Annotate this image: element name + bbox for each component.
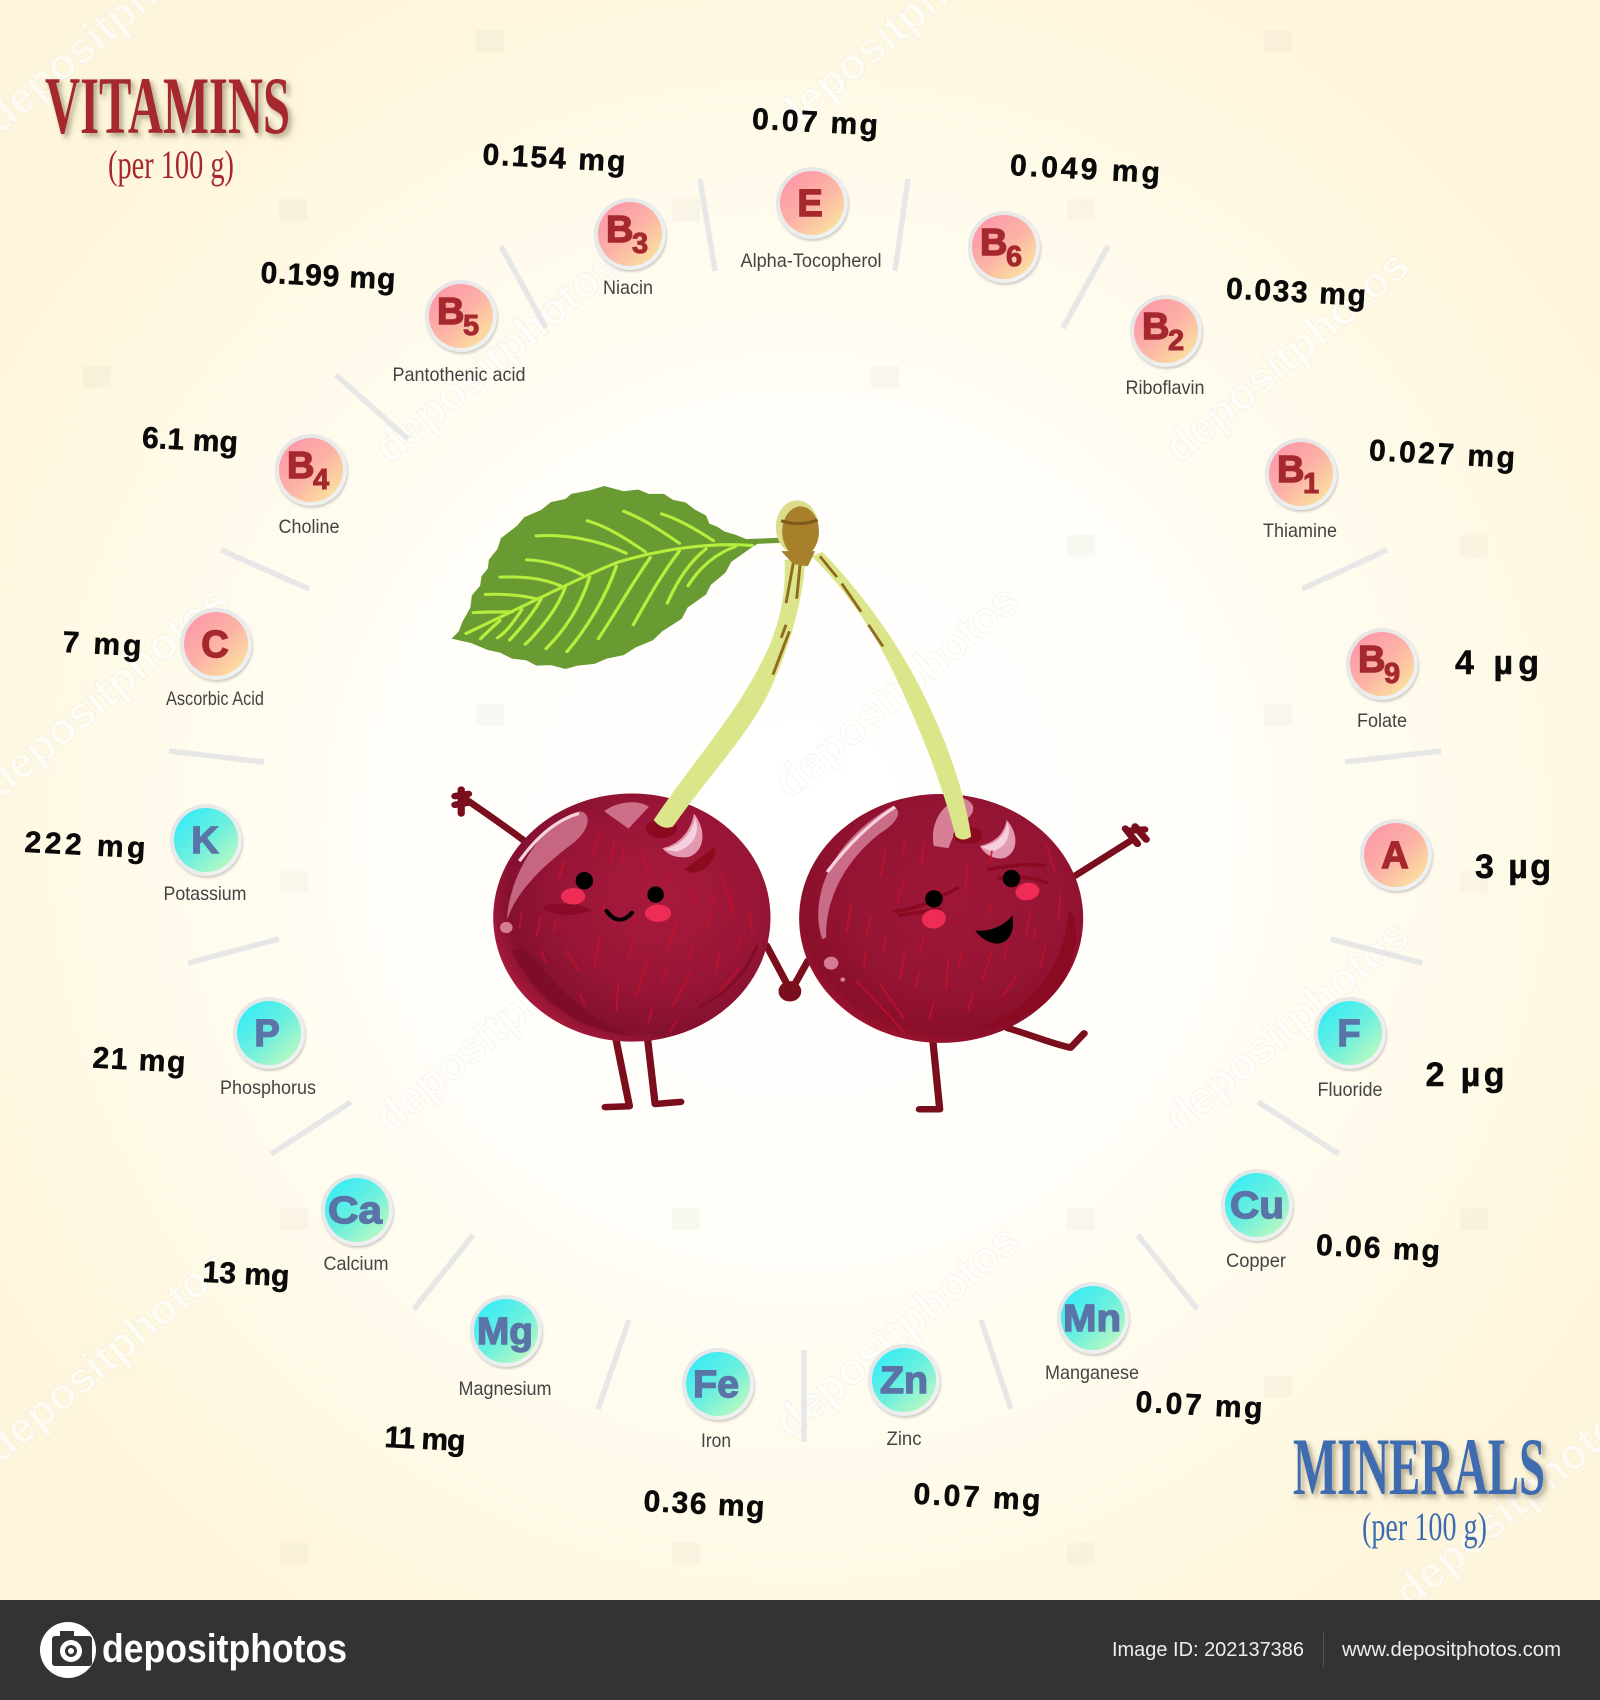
name: Potassium	[164, 883, 246, 905]
name: Phosphorus	[220, 1077, 316, 1099]
amount: 0.033 mg	[1225, 272, 1367, 313]
badge Ca	[321, 1174, 393, 1246]
amount: 13 mg	[202, 1256, 290, 1293]
amount: 21 mg	[92, 1042, 186, 1079]
badge B6: 6	[1006, 241, 1022, 273]
nutrient: vitamin B5	[260, 256, 526, 386]
logo camera icon	[40, 1622, 96, 1678]
amount: 0.154 mg	[482, 138, 626, 179]
nutrient: vitamin B1	[1263, 434, 1516, 542]
watermarks: depositphotos	[1155, 240, 1419, 473]
badge C: C	[201, 624, 229, 666]
tick dividers	[169, 179, 1441, 1442]
name: Zinc	[886, 1428, 922, 1450]
name: Magnesium	[458, 1378, 552, 1400]
nutrient: vitamin B2	[1126, 272, 1367, 399]
right cherry face	[919, 870, 1042, 944]
watermarks: depositphotos	[365, 910, 629, 1143]
badge B1: B	[1277, 449, 1304, 491]
badge A	[1360, 819, 1432, 891]
name: Riboflavin	[1126, 377, 1204, 399]
name: Choline	[278, 516, 340, 538]
left cherry limbs	[455, 790, 791, 1107]
title: minerals	[1293, 1421, 1545, 1549]
right cherry body	[799, 794, 1083, 1043]
nutrient: magnesium	[384, 1295, 552, 1458]
left cherry face	[561, 872, 671, 922]
badge Cu	[1221, 1169, 1293, 1241]
nutrient: zinc	[868, 1344, 1041, 1517]
badge Mn	[1057, 1282, 1129, 1354]
name: Calcium	[324, 1253, 388, 1275]
image id: Image ID: 202137386	[1112, 1639, 1304, 1661]
badge B4: B	[287, 445, 314, 487]
badge B2: B	[1142, 306, 1169, 348]
badge B3: B	[606, 209, 633, 251]
nutrient: vitamin B9	[1346, 628, 1539, 732]
amount: 11 mg	[384, 1421, 466, 1458]
badge B2	[1130, 295, 1202, 367]
badge P	[233, 997, 305, 1069]
left cherry body	[493, 794, 771, 1042]
name: Thiamine	[1263, 520, 1337, 542]
amount: 2 µg	[1426, 1056, 1504, 1094]
amount: 0.027 mg	[1368, 434, 1516, 475]
badge Fe	[682, 1348, 754, 1420]
footer bar	[0, 1600, 1600, 1700]
badge P: P	[254, 1013, 280, 1055]
amount: 6.1 mg	[141, 422, 239, 459]
subtitle: vitamins per 100 g: (per 100 g)	[108, 142, 234, 187]
badge K	[170, 804, 242, 876]
amount: 7 mg	[62, 626, 142, 663]
stem knot	[776, 500, 819, 566]
badge B4	[275, 434, 347, 506]
leaf veins	[466, 511, 752, 652]
badge B5: B	[437, 291, 464, 333]
nutrient: iron	[643, 1348, 765, 1524]
badge E	[776, 167, 848, 239]
badge K: K	[191, 820, 219, 862]
badge Cu: Cu	[1230, 1185, 1284, 1227]
watermarks: depositphotos	[765, 575, 1029, 808]
name: Ascorbic Acid	[166, 688, 264, 710]
amount: 0.199 mg	[260, 256, 396, 297]
title: vitamins: VITAMINS	[45, 60, 290, 151]
website: www.depositphotos.com	[1341, 1639, 1561, 1661]
badge B9: B	[1358, 639, 1385, 681]
badge F: F	[1337, 1013, 1361, 1055]
name: Fluoride	[1318, 1079, 1382, 1101]
nutrient: vitamin A	[1360, 819, 1551, 891]
amount: 0.06 mg	[1315, 1229, 1441, 1268]
name: Copper	[1226, 1250, 1286, 1272]
nutrient: manganese	[1045, 1282, 1263, 1425]
badge B1	[1265, 438, 1337, 510]
nutrient: phosphorus	[92, 997, 316, 1099]
badge B1: 1	[1303, 468, 1319, 500]
nutrient: vitamin C	[62, 608, 264, 710]
amount: 3 µg	[1475, 848, 1551, 886]
subtitle: minerals per 100 g: (per 100 g)	[1362, 1504, 1487, 1549]
title: vitamins	[45, 60, 290, 187]
amount: 222 mg	[24, 826, 146, 865]
badge B3	[594, 198, 666, 270]
amount: 4 µg	[1455, 644, 1539, 682]
badge Mg: Mg	[477, 1311, 533, 1353]
badge Zn	[868, 1344, 940, 1416]
footer divider	[1323, 1633, 1324, 1667]
badge B2: 2	[1168, 325, 1184, 357]
name: Iron	[701, 1430, 731, 1452]
badge B5: 5	[463, 310, 479, 342]
nutrient: copper	[1221, 1169, 1441, 1272]
badge B3: 3	[632, 228, 648, 260]
nutrient: potassium	[24, 804, 246, 905]
badge B5	[425, 280, 497, 352]
amount: 0.07 mg	[913, 1478, 1041, 1517]
watermarks: depositphotos	[1155, 910, 1419, 1143]
right cherry limbs	[782, 826, 1146, 1109]
badge B6	[968, 211, 1040, 283]
badge B9	[1346, 628, 1418, 700]
badge Mg	[470, 1295, 542, 1367]
amount: 0.36 mg	[643, 1485, 765, 1524]
name: Alpha-Tocopherol	[740, 250, 882, 272]
badge Ca: Ca	[328, 1190, 383, 1232]
badge B6: B	[980, 222, 1007, 264]
logo wordmark: depositphotos	[102, 1627, 347, 1671]
badge E: E	[797, 183, 823, 225]
badge Fe: Fe	[693, 1364, 739, 1406]
watermarks: depositphotos	[365, 240, 629, 473]
name: Niacin	[603, 277, 653, 299]
badge B4: 4	[313, 464, 329, 496]
name: Folate	[1357, 710, 1407, 732]
nutrient: fluoride	[1314, 997, 1504, 1101]
stems	[654, 552, 971, 839]
nutrient: vitamin B6	[968, 149, 1161, 283]
badge Mn: Mn	[1063, 1298, 1121, 1340]
nutrient: vitamin B3	[482, 138, 666, 299]
amount: 0.07 mg	[1135, 1386, 1263, 1425]
amount: 0.049 mg	[1009, 149, 1161, 190]
badge Zn: Zn	[880, 1360, 928, 1402]
name: Manganese	[1045, 1362, 1139, 1384]
nutrient: calcium	[202, 1174, 393, 1293]
badge A: A	[1381, 835, 1409, 877]
leaf	[452, 486, 781, 669]
watermarks: depositphotos	[765, 1215, 1029, 1448]
badge B9: 9	[1384, 658, 1400, 690]
nutrient: vitamin B4	[141, 422, 347, 538]
illustration: cherry characters	[452, 486, 1146, 1109]
badge F	[1314, 997, 1386, 1069]
name: Pantothenic acid	[392, 364, 526, 386]
amount: 0.07 mg	[751, 103, 879, 142]
nutrient: vitamin E	[740, 103, 882, 272]
badge C	[180, 608, 252, 680]
